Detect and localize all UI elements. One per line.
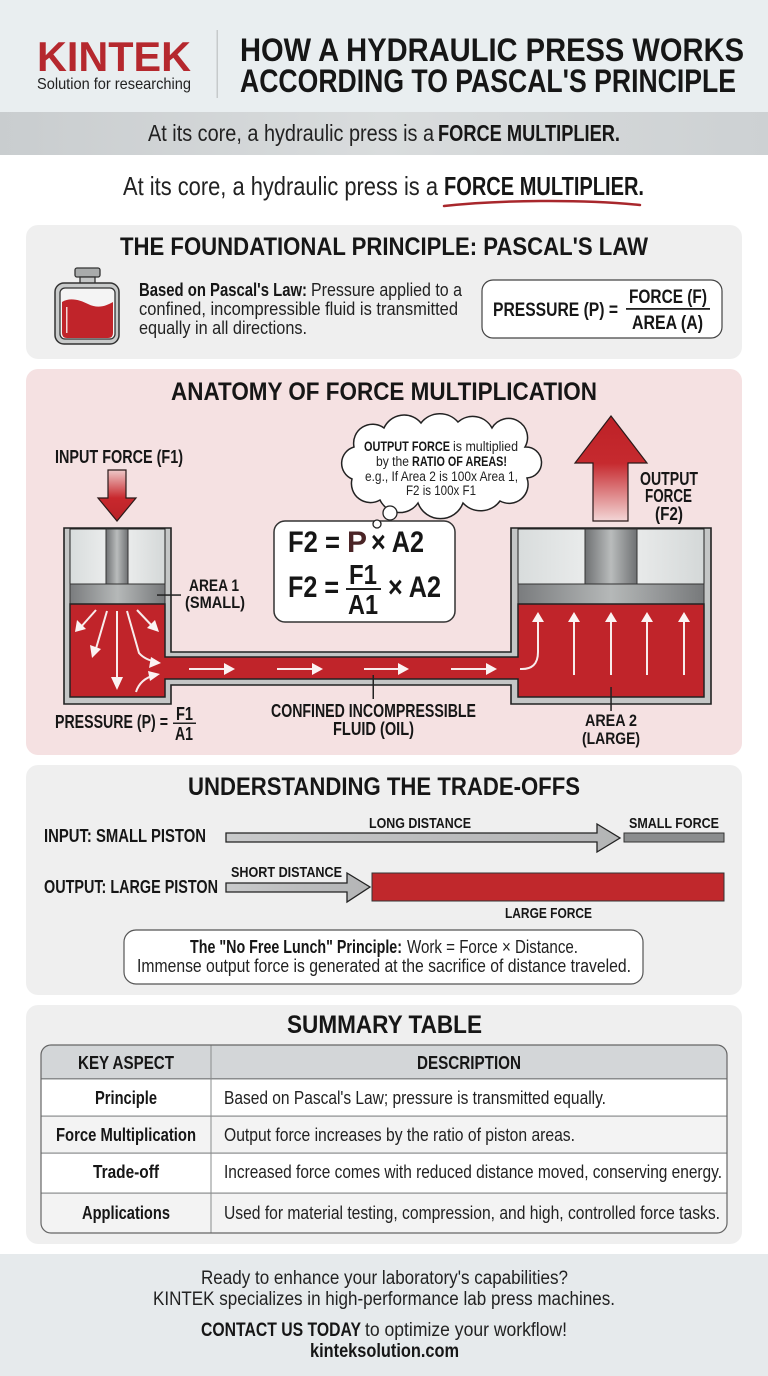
formula box: pressure: AREA (A)	[632, 312, 703, 334]
table	[41, 1045, 727, 1233]
formula box: pressure: FORCE (F)	[629, 286, 707, 308]
heading: UNDERSTANDING THE TRADE-OFFS	[188, 773, 580, 801]
large cylinder air space	[518, 529, 704, 584]
footer call to action: to optimize your workflow!	[365, 1320, 567, 1341]
hydraulic fluid	[70, 604, 704, 697]
callout: thought cloud: OUTPUT FORCE	[364, 439, 450, 454]
footer call to action: Ready to enhance your laboratory's capabilities?	[201, 1268, 568, 1289]
table header	[78, 1053, 521, 1073]
label: confined fluid: FLUID (OIL)	[333, 719, 414, 739]
row: trade-off: Trade-off	[93, 1162, 160, 1182]
label: area 2	[582, 687, 640, 748]
tagline with underline	[123, 171, 644, 206]
header	[0, 0, 768, 112]
callout: no free lunch: Work = Force × Distance.	[407, 937, 578, 957]
subtitle band: At its core, a hydraulic press is a	[148, 120, 434, 146]
arrow: input force down	[98, 470, 136, 521]
subtitle band: FORCE MULTIPLIER.	[438, 120, 620, 146]
label: output force: FORCE	[645, 486, 692, 506]
callout: thought cloud: by the	[376, 454, 409, 469]
row: input small piston: INPUT: SMALL PISTON	[44, 826, 206, 846]
row: principle: Based on Pascal's Law; pressure is transmitted equally.	[224, 1088, 606, 1108]
row: input small piston	[44, 815, 724, 852]
formula box: pressure	[482, 280, 722, 338]
row: output large piston: LARGE FORCE	[505, 905, 592, 922]
label: area 1	[157, 576, 245, 612]
formula box: pressure: PRESSURE (P) =	[493, 299, 618, 321]
logo: KINTEK: KINTEK	[37, 33, 191, 80]
text: Pascal's law explanation: confined, incompressible fluid is transmitted	[139, 299, 458, 319]
heading: THE FOUNDATIONAL PRINCIPLE: PASCAL'S LAW	[120, 233, 648, 261]
large piston head	[518, 584, 704, 604]
label: confined fluid: CONFINED INCOMPRESSIBLE	[271, 701, 476, 721]
text: Pascal's law explanation	[139, 280, 463, 338]
label: confined fluid	[271, 675, 476, 739]
tagline with underline: At its core, a hydraulic press is a	[123, 171, 438, 201]
footer call to action: kinteksolution.com	[310, 1341, 459, 1362]
label: output force: (F2)	[655, 504, 683, 524]
formula box: F2: F2 =	[288, 526, 340, 559]
label: pressure formula: F1	[176, 704, 193, 724]
panel: anatomy of force multiplication	[26, 369, 742, 755]
row: input small piston: LONG DISTANCE	[369, 815, 471, 832]
text: Pascal's law explanation: Based on Pascal's Law:	[139, 280, 307, 300]
label: area 1: AREA 1	[189, 576, 239, 595]
arrowheads	[75, 612, 690, 690]
label: output force	[640, 469, 698, 524]
row: input small piston: SMALL FORCE	[629, 815, 719, 832]
formula box: F2: A1	[348, 589, 378, 620]
flow arrows	[80, 610, 684, 692]
panel: Pascal's law	[26, 225, 742, 359]
callout: no free lunch: The "No Free Lunch" Principle:	[190, 937, 402, 957]
callout: thought cloud: is multiplied	[453, 439, 518, 454]
row: principle: Principle	[95, 1088, 157, 1108]
formula box: F2	[274, 521, 455, 622]
formula box: F2: F1	[349, 559, 377, 590]
table header: KEY ASPECT	[78, 1053, 174, 1073]
row: force multiplication: Output force increases by the ratio of piston areas.	[224, 1125, 575, 1145]
row: applications: Applications	[82, 1203, 170, 1223]
label: pressure formula	[55, 704, 196, 744]
row: output large piston	[44, 864, 724, 922]
row: force multiplication: Force Multiplication	[56, 1125, 196, 1145]
callout: no free lunch: Immense output force is generated at the sacrifice of distance traveled.	[137, 956, 631, 976]
small cylinder air space	[70, 529, 165, 584]
icon: fluid bottle	[55, 268, 119, 344]
label: area 1: (SMALL)	[185, 593, 245, 612]
large piston rod	[585, 529, 637, 584]
label: pressure formula: A1	[175, 724, 193, 744]
formula box: F2: F2 =	[288, 571, 339, 604]
row: principle	[95, 1088, 606, 1108]
label: input force: INPUT FORCE (F1)	[55, 447, 183, 467]
diagram: hydraulic press	[64, 528, 711, 704]
tagline with underline: FORCE MULTIPLIER.	[444, 171, 644, 201]
logo: KINTEK: Solution for researching	[37, 76, 191, 93]
formula box: F2: × A2	[388, 571, 441, 604]
row: force multiplication	[56, 1125, 575, 1145]
callout: thought cloud: F2 is 100x F1	[406, 483, 476, 498]
panel: summary table	[26, 1005, 742, 1244]
row: output large piston: OUTPUT: LARGE PISTON	[44, 877, 218, 897]
footer call to action: CONTACT US TODAY	[201, 1320, 361, 1341]
label: area 2: AREA 2	[585, 711, 637, 730]
callout: no free lunch	[124, 930, 643, 984]
heading: ANATOMY OF FORCE MULTIPLICATION	[171, 378, 597, 406]
callout: thought cloud: e.g., If Area 2 is 100x Area 1,	[365, 469, 518, 484]
footer call to action	[0, 1254, 768, 1376]
arrow: output force up	[575, 416, 647, 521]
row: output large piston: SHORT DISTANCE	[231, 864, 342, 881]
text: Pascal's law explanation: Pressure applied to a	[311, 280, 463, 300]
heading: SUMMARY TABLE	[287, 1011, 482, 1039]
label: output force: OUTPUT	[640, 469, 698, 489]
formula box: F2: × A2	[371, 526, 424, 559]
callout: thought cloud: RATIO OF AREAS!	[412, 454, 507, 469]
title	[240, 32, 744, 99]
small piston rod	[106, 529, 128, 584]
subtitle band	[0, 112, 768, 155]
table header: DESCRIPTION	[417, 1053, 521, 1073]
callout: thought cloud	[342, 414, 542, 528]
label: pressure formula: PRESSURE (P) =	[55, 712, 168, 732]
panel: trade-offs	[26, 765, 742, 995]
text: Pascal's law explanation: equally in all directions.	[139, 318, 307, 338]
footer call to action: KINTEK specializes in high-performance lab press machines.	[153, 1289, 615, 1310]
formula box: F2: P	[347, 526, 367, 559]
small piston head	[70, 584, 165, 604]
label: area 2: (LARGE)	[582, 729, 640, 748]
